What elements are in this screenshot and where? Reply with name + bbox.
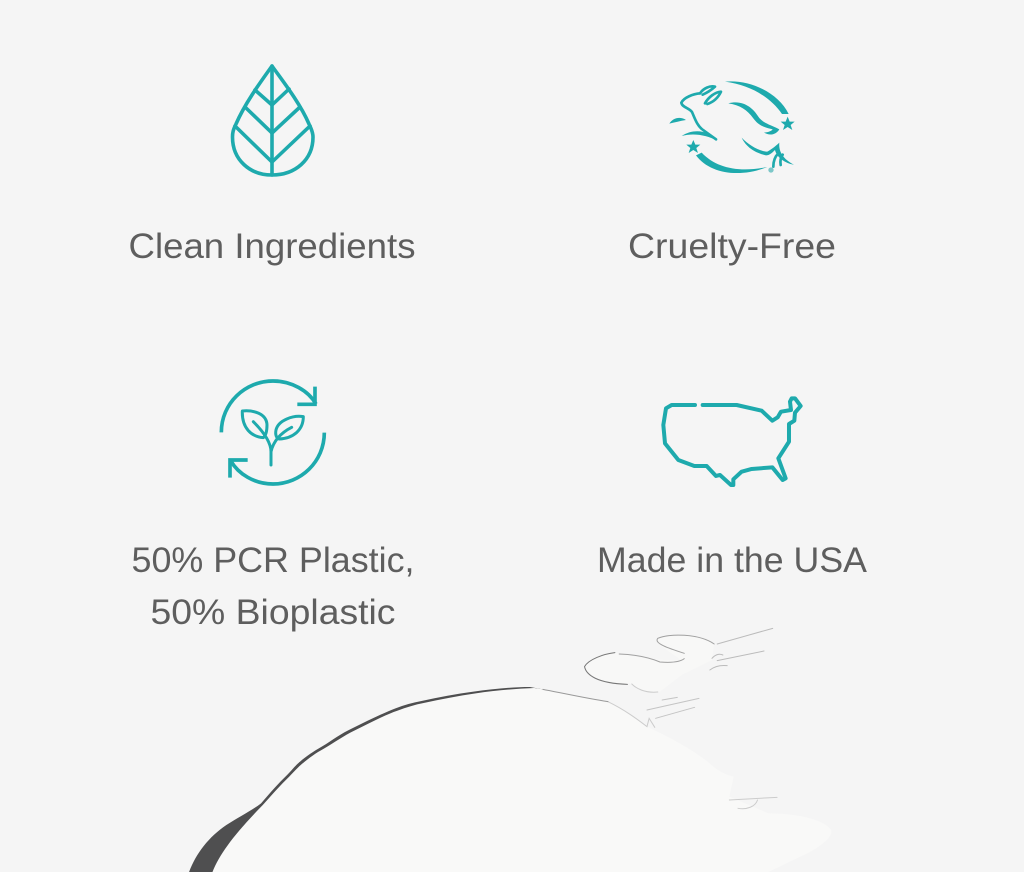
label: clean ingredients: Clean Ingredients (128, 226, 416, 266)
smear edge lines (543, 628, 777, 809)
swatch smear top (584, 635, 714, 692)
icon: leaping rabbit (669, 81, 795, 173)
panel: cruelty-free (628, 81, 836, 266)
label: made in the USA: Made in the USA (597, 540, 867, 580)
panel: recycled plastic (132, 381, 414, 632)
swatch shadow edge (189, 687, 543, 872)
panel: clean ingredients (128, 66, 416, 266)
panel: made in the USA (597, 398, 867, 580)
swatch body (212, 688, 831, 872)
label: 50% PCR plastic, 50% bioplastic: 50% Bioplastic (150, 592, 396, 632)
icon: USA outline map (663, 398, 801, 485)
icon: recycling arrows with sprout (221, 381, 324, 484)
label: 50% PCR plastic, 50% bioplastic: 50% PCR Plastic, (132, 540, 414, 580)
icon: leaf drop (232, 66, 313, 175)
label: cruelty-free: Cruelty-Free (628, 226, 836, 266)
cream swatch (189, 628, 831, 872)
label: 50% PCR plastic, 50% bioplastic (132, 540, 414, 632)
